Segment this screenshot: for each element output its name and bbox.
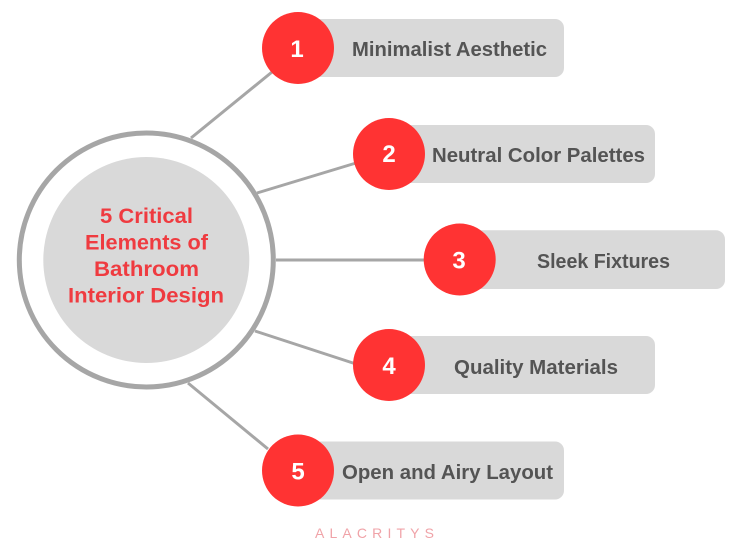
label: Open and Airy Layout (342, 462, 553, 484)
label bar (298, 19, 564, 77)
number: 4 (382, 353, 396, 380)
number badge (262, 434, 334, 506)
central title: Elements of (85, 232, 209, 254)
outer ring (19, 133, 273, 387)
number badge (353, 329, 425, 401)
central title: Bathroom (94, 258, 199, 281)
label bar (389, 125, 655, 183)
number badge (262, 12, 334, 84)
item 5 (262, 434, 564, 506)
label: Minimalist Aesthetic (352, 39, 547, 61)
central title: 5 Critical (100, 205, 193, 228)
label: Neutral Color Palettes (432, 145, 645, 167)
inner disc (43, 157, 249, 363)
number: 2 (382, 141, 396, 168)
item 1 (262, 12, 564, 84)
label bar (389, 336, 655, 394)
number badge (353, 118, 425, 190)
central title (68, 205, 224, 308)
number: 3 (452, 248, 466, 274)
brand wordmark: ALACRITYS (315, 525, 434, 541)
label bar (460, 230, 725, 289)
central title: Interior Design (68, 284, 224, 308)
item 2 (353, 118, 655, 190)
item 4 (353, 329, 655, 401)
number badge (424, 224, 496, 296)
connector lines (188, 72, 425, 449)
label: Sleek Fixtures (537, 251, 670, 273)
number: 1 (290, 36, 304, 63)
number: 5 (291, 458, 305, 486)
label bar (298, 442, 564, 500)
label: Quality Materials (454, 357, 618, 379)
item 3 (424, 224, 725, 296)
central hub (19, 133, 273, 387)
